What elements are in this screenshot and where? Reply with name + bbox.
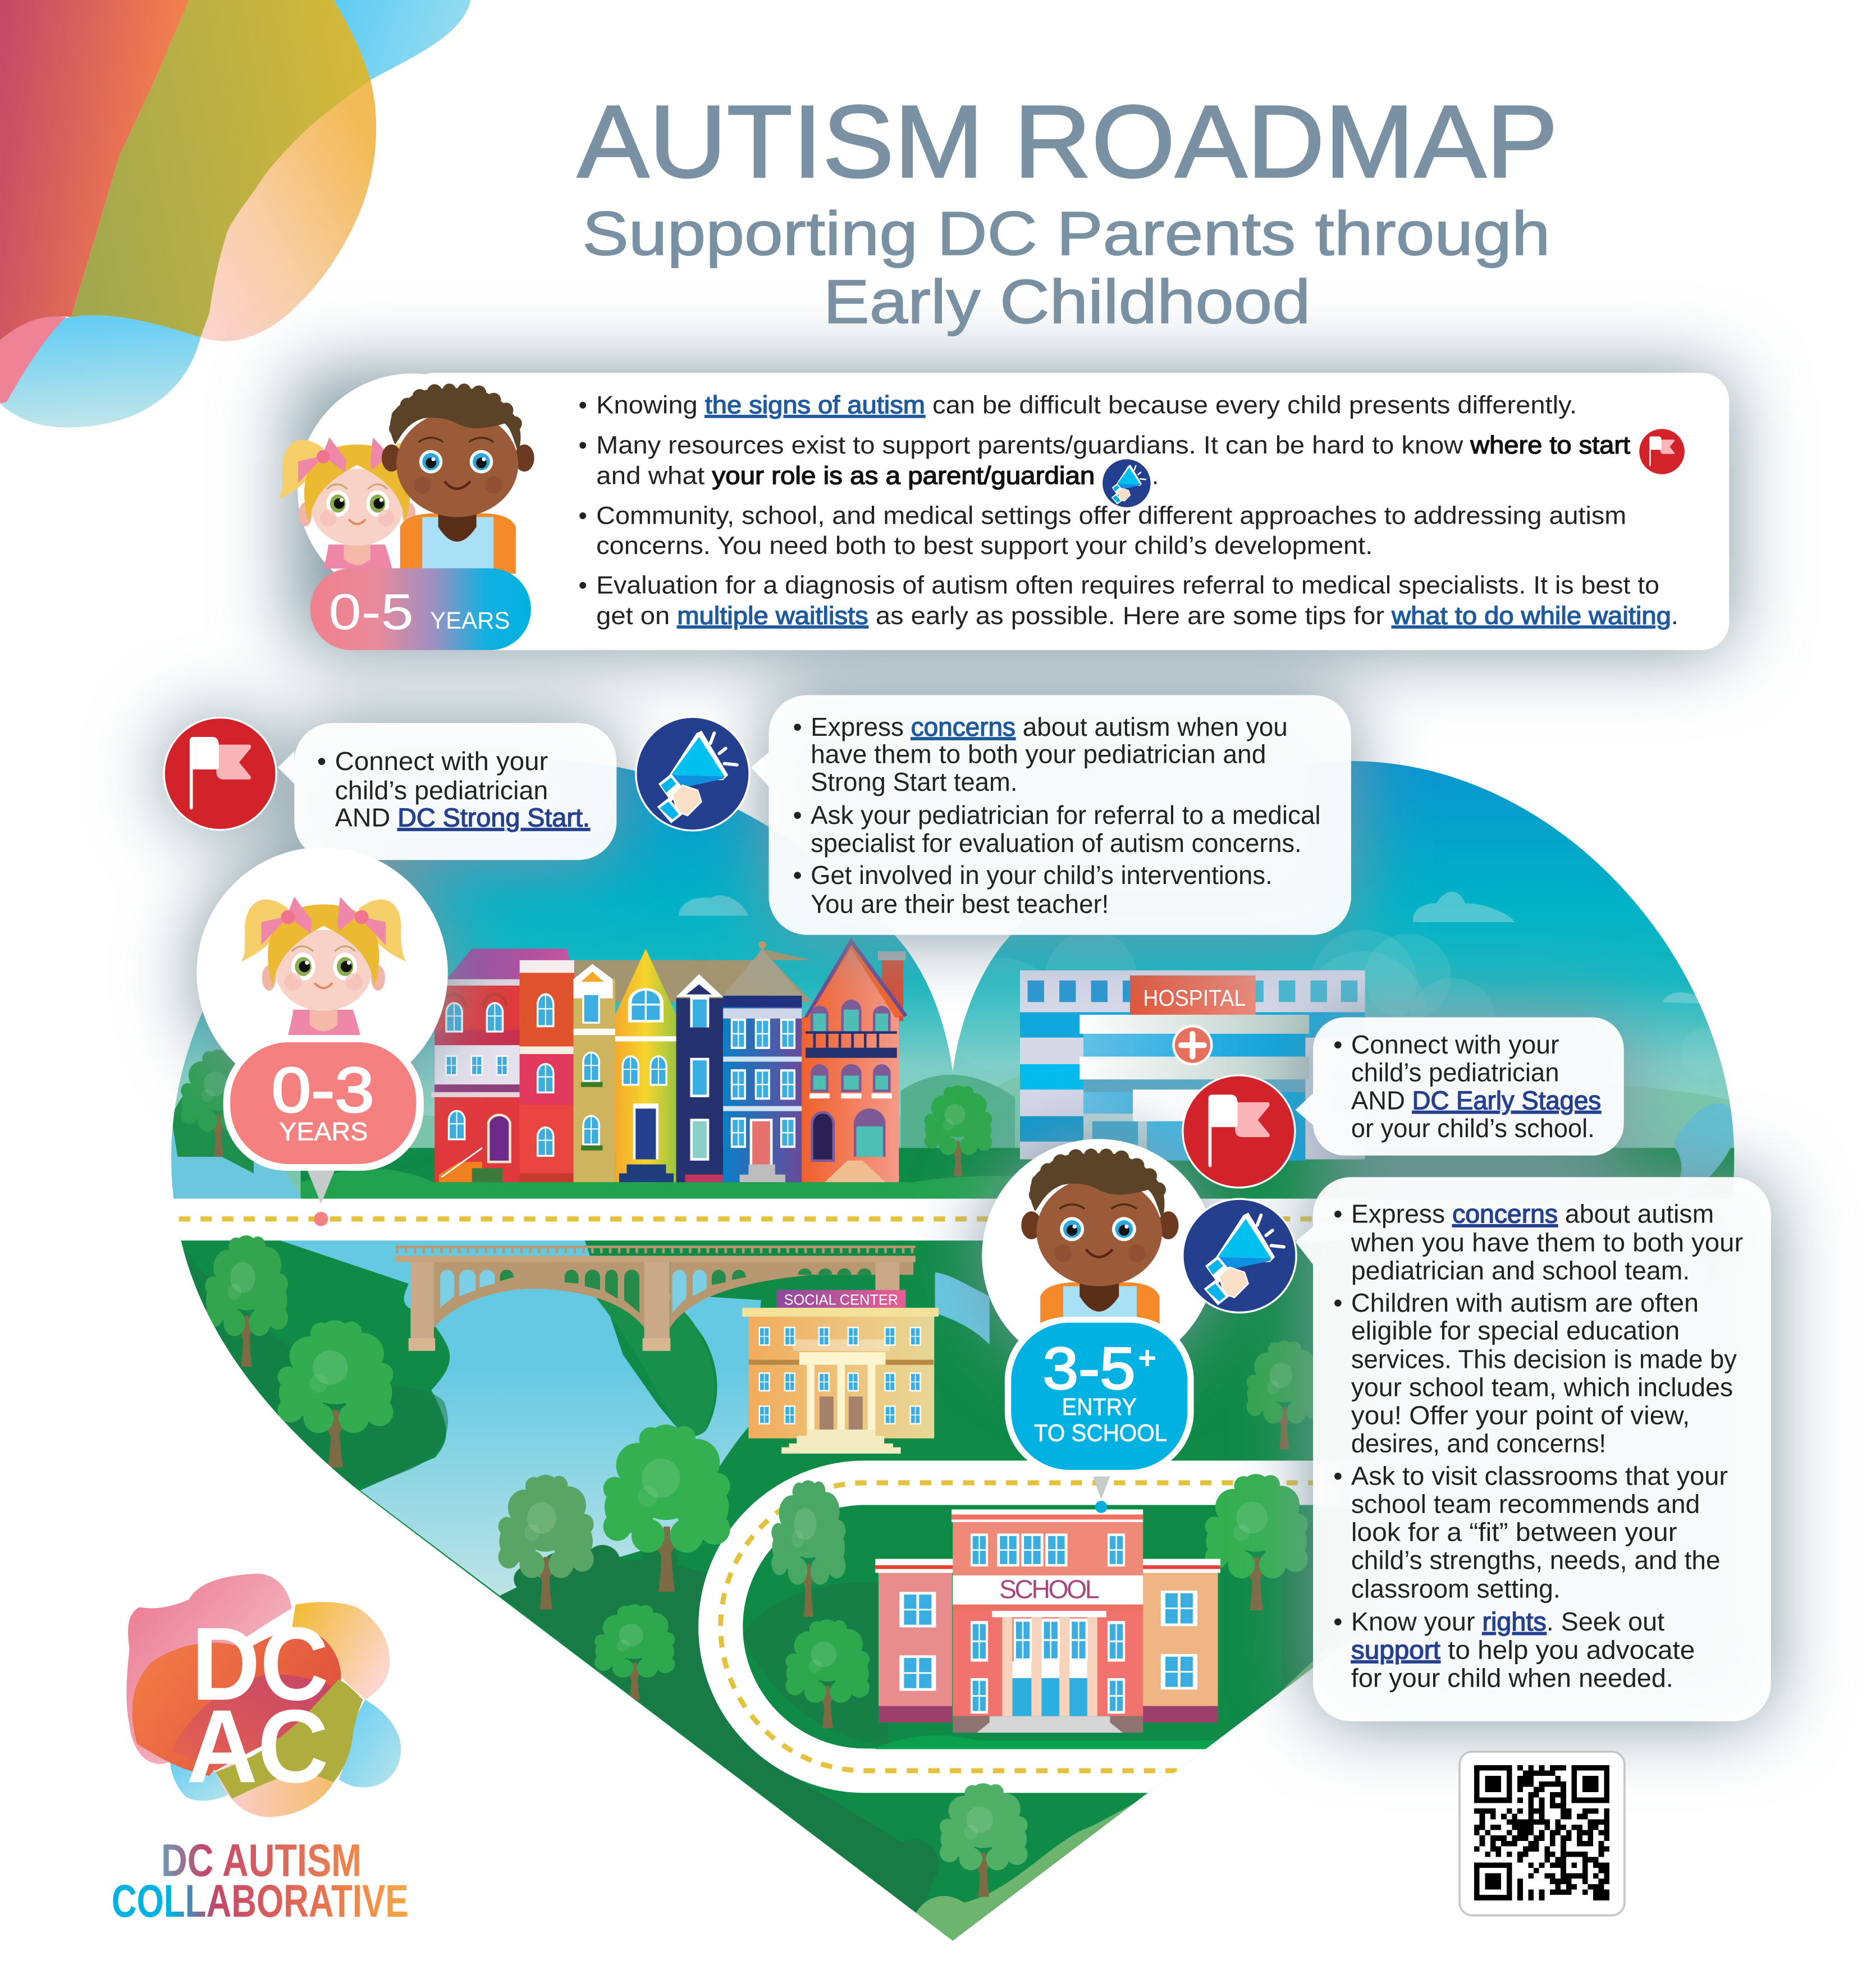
title: AUTISM ROADMAP [577,84,1558,199]
DC Autism Collaborative logo [126,1574,401,1817]
panel: 0-3 connect callout [278,723,616,860]
soft drop shadows [164,373,1771,1721]
badge: 3-5 entry to school [1005,1317,1194,1475]
overview bullet text: get on multiple waitlists as early as possible. Here are some tips for what to do while waiting . [596,602,1678,630]
social center building: SOCIAL CENTER [784,1291,898,1308]
panel: 3-5 connect callout: • [1333,1030,1342,1059]
panel: 0-3 connect callout: child’s pediatrician [335,776,548,805]
panel: 0-3 express concerns callout: • [793,712,802,741]
subtitle: Early Childhood [824,267,1311,336]
panel: 3-5 connect callout: or your child’s school. [1351,1114,1595,1143]
panel: 3-5 connect callout: AND DC Early Stages [1351,1085,1601,1115]
panel: 3-5 express concerns callout: look for a “fit” between your [1351,1517,1677,1546]
badge: 0-5 years: 0-5 [328,584,414,640]
panel: 3-5 express concerns callout: Ask to visit classrooms that your [1351,1461,1728,1490]
DC Autism Collaborative logo: DC [191,1606,328,1722]
icon: inline megaphone [1102,459,1151,508]
panel: 3-5 connect callout: child’s pediatrician [1351,1058,1559,1087]
school building [875,1509,1220,1733]
panel: 0-3 express concerns callout: • [793,860,802,890]
panel: 0-3 express concerns callout: have them to both your pediatrician and [811,739,1266,768]
badge: 0-5 years [310,568,531,650]
logo wordmark: DC AUTISM [161,1835,362,1886]
row of colorful houses [431,941,906,1182]
badge: 0-3 years: 0-3 [272,1055,374,1125]
social center building [742,1290,939,1454]
illustrated heart scene [165,755,1747,1953]
panel: 0-3 express concerns callout: Ask your pediatrician for referral to a medical [811,800,1321,830]
logo wordmark [112,1835,409,1927]
panel: 3-5 connect callout [1295,1017,1624,1156]
icon: megaphone 0-3 [635,716,751,831]
overview bullet text: Community, school, and medical settings offer different approaches to addressing autism [596,502,1626,529]
panel: 0-3 express concerns callout: Strong Start team. [811,767,1017,796]
QR code [1460,1752,1625,1916]
overview bullet text: • [579,392,587,419]
panel: 3-5 connect callout: Connect with your [1351,1030,1559,1059]
boy portrait circle [982,1139,1215,1372]
overview bullet text: • [579,432,587,459]
panel: 3-5 express concerns callout: you! Offer your point of view, [1351,1400,1690,1430]
panel: 3-5 express concerns callout: when you have them to both your [1351,1227,1743,1257]
overview bullet text: • [579,502,587,529]
overview bullet text: Many resources exist to support parents/guardians. It can be hard to know where to start [596,432,1630,459]
panel: 3-5 express concerns callout: school team recommends and [1351,1490,1700,1519]
girl portrait circle [196,848,448,1098]
road marker 3-5 [1093,1477,1110,1513]
icon: megaphone 3-5 [1182,1198,1297,1313]
trees [181,1050,1322,1897]
panel: 3-5 express concerns callout: • [1333,1461,1342,1490]
panel: overview 0-5 years [279,373,1729,650]
school building: SCHOOL [999,1575,1099,1604]
overview children [279,383,534,574]
boy portrait [1021,1148,1179,1345]
overview bullet text: Knowing the signs of autism can be difficult because every child presents differently. [596,392,1577,419]
panel: 3-5 express concerns callout [1295,1177,1771,1721]
badge: 3-5 entry to school: + [1138,1340,1156,1375]
panel: 3-5 express concerns callout: Express concerns about autism [1351,1199,1714,1229]
subtitle: Supporting DC Parents through [582,199,1550,268]
panel: 3-5 express concerns callout: your school team, which includes [1351,1372,1733,1401]
panel: 0-3 connect callout: • [317,746,326,776]
panel: 3-5 express concerns callout: support to help you advocate [1351,1636,1695,1665]
icon: inline flag [1639,428,1685,475]
panel: 3-5 express concerns callout: • [1333,1288,1342,1317]
panel: 3-5 express concerns callout: services. This decision is made by [1351,1345,1737,1374]
ground below road [180,1237,1314,1941]
icon: red flag 3-5 [1182,1074,1296,1189]
hospital building [1020,970,1365,1161]
overview bullet text [579,392,1678,630]
panel: 3-5 express concerns callout: • [1333,1199,1342,1229]
panel: 3-5 express concerns callout: for your child when needed. [1351,1663,1673,1692]
panel: 3-5 express concerns callout: Know your rights. Seek out [1351,1607,1664,1636]
panel: 3-5 express concerns callout: Children with autism are often [1351,1288,1699,1317]
main horizontal road [165,1199,1744,1240]
overview bullet text: . [1152,462,1159,490]
panel: 0-3 express concerns callout: Get involved in your child’s interventions. [811,860,1273,890]
badge: 0-3 years [223,1038,424,1171]
badge: 3-5 entry to school: TO SCHOOL [1034,1419,1167,1446]
subtitle [582,199,1550,336]
curved road [721,1483,1535,1771]
badge: 3-5 entry to school: 3-5 [1043,1335,1136,1402]
DC Autism Collaborative logo: AC [186,1688,328,1804]
overview bullet text: • [579,572,587,599]
panel: 3-5 express concerns callout: eligible for special education [1351,1316,1680,1345]
panel: 3-5 express concerns callout: classroom setting. [1351,1574,1561,1603]
panel: 3-5 express concerns callout: • [1333,1607,1342,1636]
panel: 0-3 express concerns callout: • [793,800,802,830]
overview bullet text: Evaluation for a diagnosis of autism often requires referral to medical specialists. It is best to [596,572,1659,599]
overview bullet text: concerns. You need both to best support your child’s development. [596,532,1373,560]
panel: 3-5 express concerns callout: child’s strengths, needs, and the [1351,1546,1720,1575]
panel: 0-3 express concerns callout: You are their best teacher! [811,889,1109,918]
girl portrait [241,897,406,1035]
decorative corner blob [0,0,470,428]
overview bullet text: and what your role is as a parent/guardian [596,462,1095,490]
panel: 3-5 express concerns callout: desires, and concerns! [1351,1429,1606,1458]
panel: 0-3 connect callout: AND DC Strong Start. [335,803,590,832]
pale green foreground [916,1649,1396,1953]
bridge [395,1245,916,1351]
panel: 3-5 express concerns callout: pediatrician and school team. [1351,1256,1690,1285]
icon: red flag 0-3 [163,717,277,831]
badge: 3-5 entry to school: ENTRY [1062,1394,1137,1421]
hospital building: HOSPITAL [1143,985,1246,1011]
badge: 0-5 years: YEARS [430,607,510,634]
road marker 0-3 [308,1171,335,1226]
panel: 0-3 express concerns callout [751,695,1351,935]
logo wordmark: COLLABORATIVE [112,1876,409,1927]
panel: 0-3 connect callout: Connect with your [335,746,548,776]
panel: 0-3 express concerns callout: Express concerns about autism when you [811,712,1288,741]
panel: 0-3 express concerns callout: specialist for evaluation of autism concerns. [811,828,1302,858]
badge: 0-3 years: YEARS [279,1117,368,1146]
